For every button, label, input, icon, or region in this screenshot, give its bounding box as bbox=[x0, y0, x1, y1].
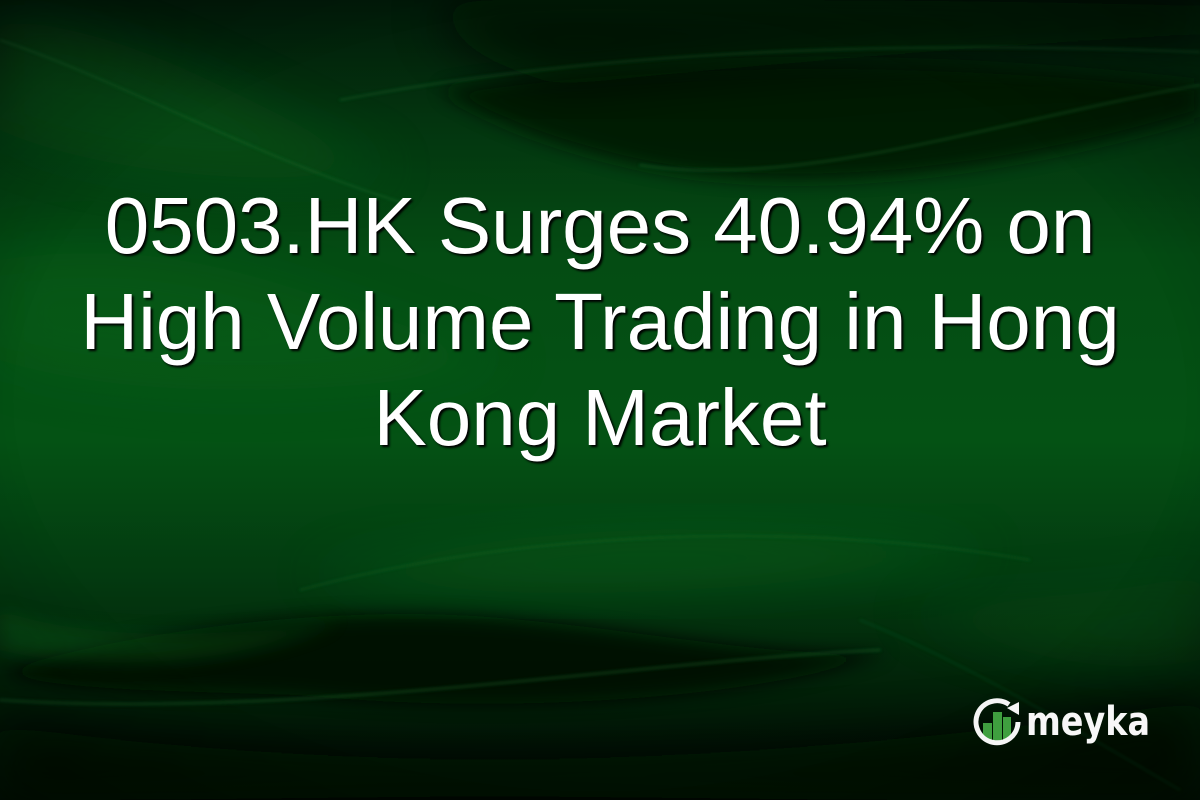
icon: circular arrow with bars bbox=[976, 701, 1019, 747]
title: 0503.HK Surges 40.94% on High Volume Trading in Hong Kong Market bbox=[80, 181, 1120, 462]
logo: meyka bbox=[974, 698, 1150, 746]
